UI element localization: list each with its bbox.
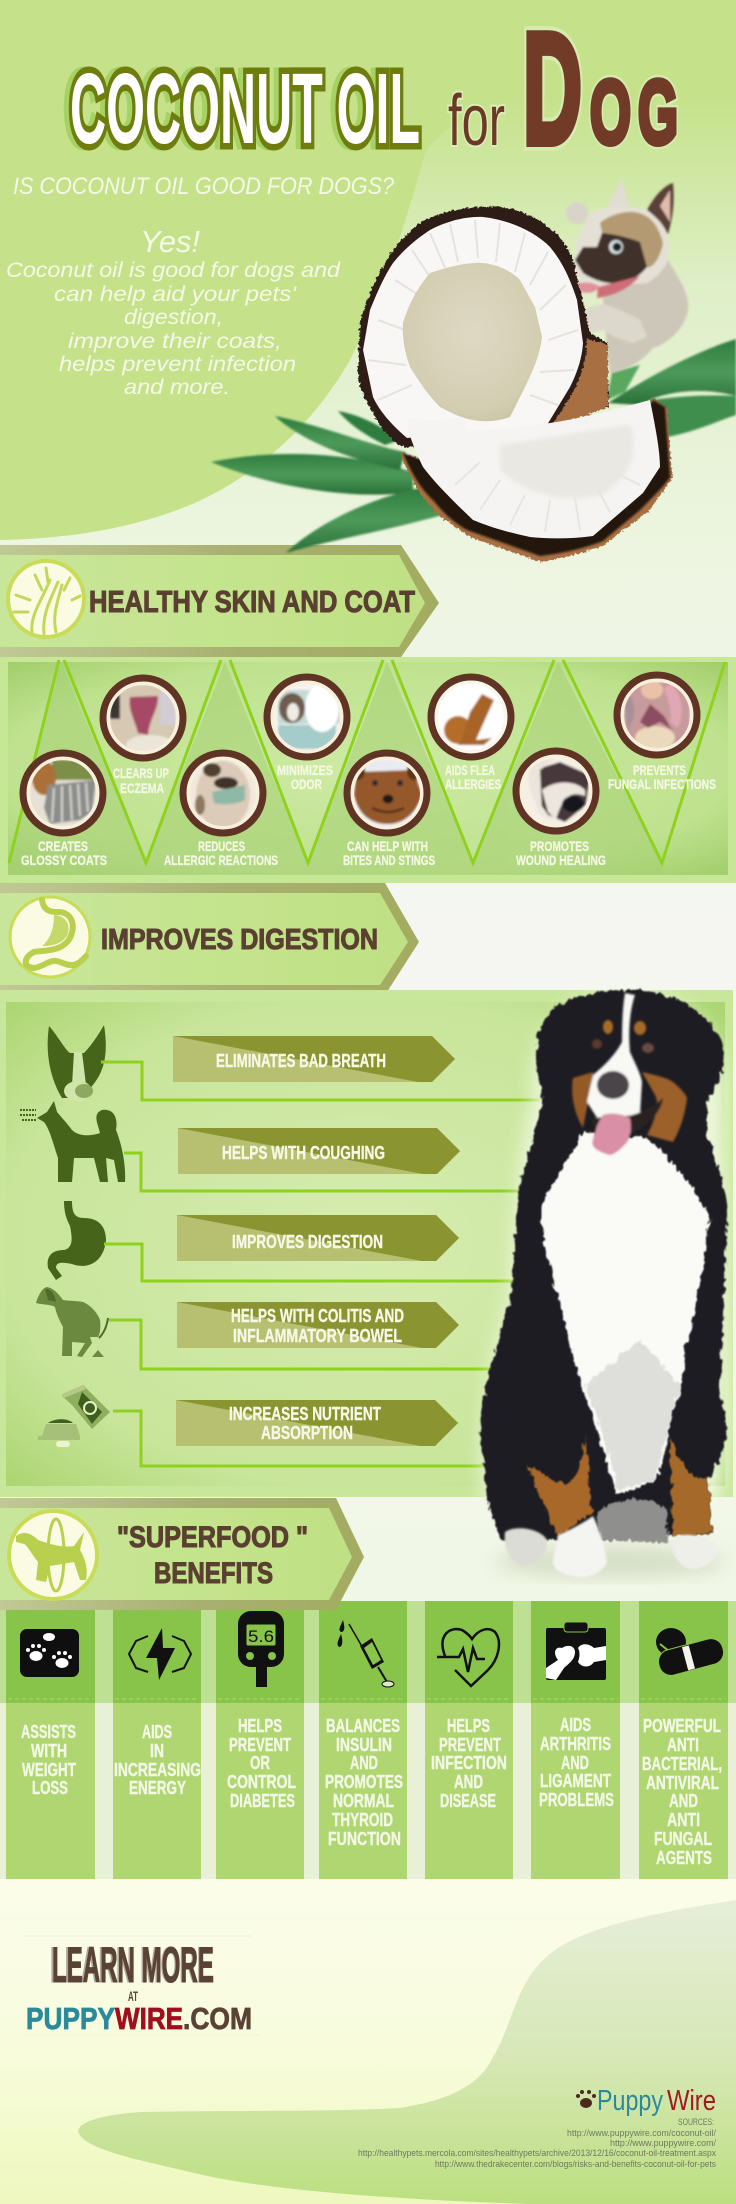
benefit: reduces allergic reactions: ALLERGIC REACTIONS — [164, 852, 278, 868]
banner heading: HEALTHY SKIN AND COAT — [89, 584, 415, 619]
icon: glucose meter — [238, 1611, 284, 1687]
benefit: fungal infections — [608, 675, 716, 792]
hero leaves — [211, 339, 736, 553]
coconut halves — [358, 207, 672, 562]
column: weight loss — [6, 1601, 95, 1879]
title: Dog: G — [638, 63, 678, 163]
answer text: digestion, — [124, 306, 223, 329]
column: thyroid: BALANCES — [326, 1716, 400, 1736]
arrow: improves digestion: IMPROVES DIGESTION — [232, 1232, 383, 1252]
puppy wire logo — [576, 2085, 716, 2117]
column: energy: IN — [150, 1741, 164, 1761]
dog body — [480, 990, 728, 1540]
answer text: Yes! — [140, 224, 200, 259]
title: Dog: O — [590, 63, 631, 163]
facial blaze — [587, 993, 642, 1118]
benefit: clears up eczema: ECZEMA — [120, 780, 164, 796]
icon: pills — [656, 1628, 726, 1678]
title: Coconut Oil — [65, 53, 420, 165]
icon: scale with paws — [20, 1629, 79, 1677]
column: thyroid: THYROID — [332, 1810, 393, 1830]
column: infection: INFECTION — [431, 1753, 507, 1773]
benefit: minimizes odor: MINIMIZES — [277, 762, 333, 778]
title: Dog: D — [523, 1, 582, 177]
column: energy: INCREASING — [114, 1760, 201, 1780]
icon: heartbeat — [437, 1629, 499, 1686]
coconut hollow — [403, 263, 542, 421]
icon: pooping dog — [36, 1287, 108, 1357]
title: Dog: O — [590, 63, 631, 163]
answer text: Coconut oil is good for dogs and — [6, 259, 341, 282]
belly fluff — [597, 1499, 668, 1543]
icon: stomach — [48, 1201, 106, 1280]
question heading: IS COCONUT OIL GOOD FOR DOGS? — [13, 173, 395, 200]
website: .COM — [183, 2001, 252, 2036]
column: antibacterial — [639, 1601, 728, 1879]
dog eye — [609, 240, 623, 254]
column: energy — [113, 1601, 201, 1879]
call to action: learn more: LEARN MORE — [50, 1937, 213, 1993]
arrow: colitis and bowel: HELPS WITH COLITIS AND — [231, 1306, 404, 1326]
eyes and brows — [592, 1020, 654, 1053]
title — [65, 1, 678, 177]
learn more text — [50, 1937, 214, 1993]
answer text: improve their coats, — [68, 330, 282, 353]
paws — [505, 1516, 717, 1577]
column: weight loss: ASSISTS — [21, 1722, 76, 1742]
column: energy: ENERGY — [129, 1778, 186, 1798]
icon: dog food — [38, 1385, 110, 1447]
tongue — [592, 1114, 631, 1155]
answer text: and more. — [124, 376, 230, 399]
benefit: bites and stings: BITES AND STINGS — [343, 852, 435, 868]
icon: glucose meter: 5.6 — [248, 1627, 274, 1646]
panel: digestion benefits — [0, 990, 733, 1497]
column: infection: HELPS — [447, 1716, 490, 1736]
call to action: learn more: LEARN MORE — [52, 1937, 214, 1993]
benefit: wound healing: WOUND HEALING — [516, 852, 606, 868]
column: arthritis: PROBLEMS — [539, 1790, 614, 1810]
panel: skin benefits — [0, 657, 736, 883]
dog ears — [607, 178, 629, 208]
column: weight loss: LOSS — [32, 1778, 68, 1798]
title: Dog: G — [638, 63, 678, 163]
column: thyroid: AND — [350, 1753, 378, 1773]
benefit: aids flea allergies: AIDS FLEA — [445, 762, 495, 778]
column: arthritis: LIGAMENT — [540, 1771, 611, 1791]
column: antibacterial: ANTI — [667, 1735, 699, 1755]
connector line 1 — [101, 1062, 540, 1100]
benefit columns — [6, 1601, 728, 1879]
dog head — [573, 207, 668, 287]
icon: syringe — [338, 1620, 394, 1687]
benefit: clears up eczema: CLEARS UP — [113, 765, 169, 781]
sources: http://www.puppywire.com/ — [610, 2138, 716, 2149]
icon: dog head — [48, 1025, 106, 1101]
column: infection — [425, 1601, 513, 1879]
column: antibacterial: AGENTS — [656, 1848, 712, 1868]
banner heading: "SUPERFOOD " — [117, 1521, 308, 1554]
nose — [597, 1071, 629, 1099]
section banner: improves digestion — [0, 883, 419, 995]
right leg — [670, 1437, 712, 1537]
icon: x-ray — [546, 1622, 606, 1680]
benefit: reduces allergic reactions — [164, 753, 278, 868]
illustration: french bulldog — [566, 178, 688, 373]
arrow: colitis and bowel — [177, 1302, 459, 1348]
column: arthritis: AIDS — [560, 1715, 591, 1735]
arrow: colitis and bowel: INFLAMMATORY BOWEL — [233, 1326, 402, 1346]
column: diabetes: DIABETES — [230, 1791, 295, 1811]
website: WIRE — [115, 2001, 183, 2036]
chest fur — [542, 1132, 710, 1495]
column: antibacterial: FUNGAL — [654, 1829, 712, 1849]
column: energy: AIDS — [142, 1722, 172, 1742]
bottom curved shape — [78, 1900, 736, 2204]
benefit: minimizes odor — [267, 677, 347, 792]
benefit: minimizes odor: ODOR — [291, 776, 322, 792]
title: Dog: D — [523, 1, 582, 177]
coconut wedge — [400, 398, 672, 562]
dog arm — [583, 305, 647, 343]
dog body — [603, 260, 688, 373]
benefit: reduces allergic reactions: REDUCES — [198, 838, 245, 854]
arrow: nutrient absorption — [176, 1400, 458, 1446]
dog face — [572, 993, 687, 1155]
call to action: learn more — [24, 1936, 260, 2036]
icon: stomach — [10, 897, 90, 977]
arrow: helps with coughing — [178, 1128, 460, 1174]
sources: http://www.puppywire.com/coconut-oil/ — [567, 2128, 716, 2139]
icon: coughing dog — [20, 1101, 125, 1182]
column: arthritis: ARTHRITIS — [540, 1734, 611, 1754]
connector line 5 — [113, 1411, 484, 1466]
dog mask — [575, 233, 647, 283]
dog fur details — [527, 1132, 712, 1543]
answer text: helps prevent infection — [59, 353, 296, 376]
icon: hair follicle — [8, 561, 84, 637]
connector line 3 — [104, 1244, 516, 1281]
column: thyroid: FUNCTION — [328, 1829, 401, 1849]
sources — [358, 2117, 716, 2170]
banner heading: IMPROVES DIGESTION — [101, 924, 378, 956]
tan cheeks — [642, 1072, 687, 1142]
column: infection: AND — [454, 1772, 483, 1792]
arrow: nutrient absorption: INCREASES NUTRIENT — [229, 1404, 381, 1424]
connector line 2 — [124, 1153, 521, 1191]
glow — [482, 990, 728, 1510]
column: infection: DISEASE — [440, 1791, 496, 1811]
benefit: wound healing — [516, 751, 606, 868]
column: diabetes: OR — [250, 1753, 270, 1773]
column: weight loss: WITH — [31, 1741, 67, 1761]
zigzag lines — [9, 660, 725, 863]
icon: paw — [576, 2090, 596, 2108]
connector line 4 — [109, 1320, 505, 1369]
illustration: bernese mountain dog — [480, 990, 728, 1578]
icon: dog through hoop — [9, 1511, 97, 1599]
superfood banner — [0, 1498, 364, 1610]
at: AT — [128, 1988, 138, 2004]
column: thyroid: INSULIN — [336, 1735, 392, 1755]
benefit: wound healing: PROMOTES — [530, 838, 589, 854]
column: thyroid: NORMAL — [333, 1791, 394, 1811]
column: antibacterial: AND — [669, 1791, 698, 1811]
column: antibacterial: ANTI — [667, 1810, 700, 1830]
benefit: aids flea allergies — [431, 677, 511, 792]
column: weight loss: WEIGHT — [22, 1760, 76, 1780]
benefit: creates glossy coats: GLOSSY COATS — [21, 852, 107, 868]
dog mouth and tongue — [572, 276, 640, 298]
icon: lightning bolt — [129, 1628, 191, 1680]
answer text: can help aid your pets' — [54, 283, 297, 306]
column: diabetes — [216, 1601, 304, 1879]
coconut half shell — [358, 207, 609, 448]
column: infection: PREVENT — [439, 1735, 501, 1755]
benefit: bites and stings — [343, 753, 435, 868]
puppy wire logo: Wire — [667, 2085, 716, 2117]
benefit: creates glossy coats — [21, 753, 107, 868]
column: arthritis — [531, 1601, 620, 1879]
benefit: aids flea allergies: ALLERGIES — [445, 776, 501, 792]
benefit: bites and stings: CAN HELP WITH — [347, 838, 428, 854]
arrow: nutrient absorption: ABSORPTION — [261, 1423, 353, 1443]
coconut flesh fibres — [368, 220, 578, 405]
column: diabetes: HELPS — [238, 1716, 282, 1736]
banner heading — [117, 1521, 308, 1590]
arrow: helps with coughing: HELPS WITH COUGHING — [222, 1143, 385, 1163]
triangles — [9, 662, 662, 875]
left leg — [527, 1433, 592, 1537]
sources: SOURCES: — [678, 2117, 714, 2128]
benefit: creates glossy coats: CREATES — [38, 838, 88, 854]
column: diabetes: CONTROL — [227, 1772, 296, 1792]
benefit columns backdrop — [0, 1601, 736, 1879]
banner heading: BENEFITS — [154, 1557, 273, 1590]
arrow: improves digestion — [177, 1215, 459, 1261]
website: PUPPY — [26, 2001, 115, 2036]
puppy wire logo: Puppy — [597, 2085, 663, 2117]
title: for: for — [448, 81, 505, 161]
hero curved shape — [0, 0, 736, 540]
benefit: clears up eczema — [103, 678, 183, 796]
column: thyroid: PROMOTES — [325, 1772, 403, 1792]
benefit: fungal infections: PREVENTS — [633, 762, 686, 778]
mouth — [590, 1098, 663, 1140]
column: thyroid — [319, 1601, 407, 1879]
column: diabetes: PREVENT — [229, 1735, 291, 1755]
arrow: eliminates bad breath: ELIMINATES BAD BREATH — [216, 1051, 386, 1071]
arrow: eliminates bad breath — [173, 1036, 455, 1082]
paw shadow — [495, 1546, 725, 1578]
answer text — [6, 224, 341, 399]
column: arthritis: AND — [561, 1753, 589, 1773]
section banner: healthy skin and coat — [0, 545, 439, 657]
